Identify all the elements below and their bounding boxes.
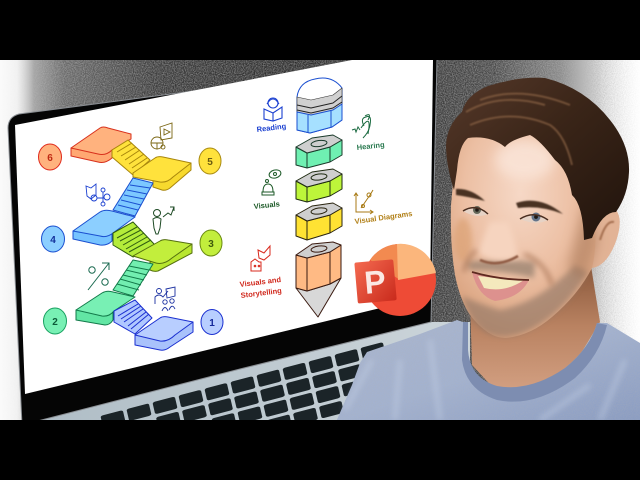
nose — [479, 222, 516, 260]
photo area — [0, 60, 640, 420]
left cheek warmth — [454, 218, 472, 262]
label: Hearing: Hearing — [356, 140, 385, 152]
textured backdrop — [0, 60, 640, 420]
ear — [590, 210, 620, 268]
laptop base — [20, 322, 470, 425]
pencil diagram — [296, 78, 342, 317]
label: Visuals and Storytelling: Visuals and — [239, 275, 282, 289]
stubble shadow — [462, 265, 588, 337]
step 4 platform — [73, 210, 135, 245]
person — [336, 78, 640, 422]
step 6 platform — [71, 127, 131, 162]
pencil eraser segment — [297, 78, 342, 133]
step 1 platform — [135, 317, 193, 350]
label: Visual Diagrams: Visual Diagrams — [354, 209, 413, 226]
stair 5 to 6 — [112, 140, 150, 175]
keyboard — [100, 342, 384, 420]
icon: PowerPoint logo — [354, 244, 436, 316]
icon: percent arrow — [88, 263, 109, 290]
icon: presenter and audience — [155, 287, 175, 311]
stair 2 to 3 — [113, 260, 153, 296]
pencil green segment — [296, 135, 342, 168]
right eye — [520, 212, 548, 223]
badge 1: 1 — [209, 318, 215, 329]
upper lip shadow — [466, 260, 535, 278]
thumbnail scene — [0, 60, 640, 420]
laptop screen — [15, 60, 433, 394]
icon: chart axes — [354, 190, 373, 214]
icon: robot and eye — [262, 169, 282, 195]
icon: PowerPoint logo: P — [363, 263, 387, 301]
step 5 platform — [133, 157, 191, 190]
hair — [446, 78, 629, 240]
badge 4 — [42, 226, 64, 252]
pencil lime segment — [296, 169, 342, 202]
badge 2 — [44, 308, 66, 334]
badge 4: 4 — [50, 235, 56, 246]
forehead highlight — [495, 140, 555, 180]
t-shirt — [336, 320, 640, 422]
label: Visuals and Storytelling — [239, 275, 283, 300]
icon: video and pie — [151, 123, 172, 149]
label: Visuals and Storytelling: Storytelling — [240, 286, 283, 300]
laptop — [8, 60, 470, 420]
left eye — [463, 206, 488, 216]
pencil orange segment and tip — [296, 242, 341, 317]
badge 3 — [200, 230, 222, 256]
icon: person with growth arrow — [153, 207, 174, 234]
badge 6 — [38, 144, 62, 170]
left eyebrow — [456, 189, 485, 201]
right cheek shadow — [568, 200, 598, 280]
laptop bezel — [8, 59, 437, 425]
neck — [470, 260, 600, 392]
badge 1 — [201, 310, 223, 334]
mouth — [472, 272, 529, 301]
number badges — [38, 144, 223, 334]
badge 5 — [199, 148, 221, 174]
stair 1 to 2 — [114, 300, 152, 334]
badge 6: 6 — [47, 153, 53, 164]
icon: reading — [264, 98, 282, 121]
face — [451, 125, 596, 338]
pencil yellow segment — [296, 203, 342, 240]
smile line — [464, 250, 552, 285]
staircase diagram — [71, 127, 193, 350]
badge 3: 3 — [208, 239, 214, 250]
hair highlights — [466, 94, 572, 165]
icon: book and robot — [251, 246, 270, 271]
icon: ear — [352, 115, 370, 138]
step 3 platform — [133, 240, 192, 271]
right eyebrow — [516, 201, 563, 214]
stair 4 to 5 — [113, 178, 153, 216]
stair 3 to 4 — [113, 222, 155, 257]
icon: book and network — [86, 184, 110, 206]
badge 2: 2 — [52, 317, 58, 328]
step 2 platform — [76, 291, 135, 325]
label: Reading: Reading — [256, 121, 287, 134]
badge 5: 5 — [207, 157, 213, 168]
label: Visuals: Visuals — [253, 199, 280, 211]
